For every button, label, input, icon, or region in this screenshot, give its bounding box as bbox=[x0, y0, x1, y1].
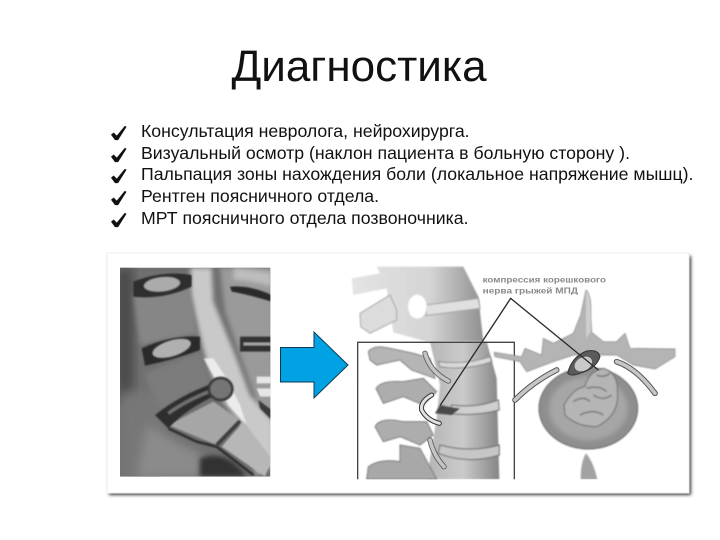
cross-section vertebra bbox=[494, 290, 675, 479]
item: consultation: Консультация невролога, нейрохирурга. bbox=[141, 121, 470, 141]
callout text: компрессия корешкового bbox=[483, 275, 606, 284]
upper vertebra bbox=[352, 267, 483, 342]
checklist bbox=[111, 121, 693, 228]
title: Диагностика bbox=[231, 42, 487, 91]
crop frame bbox=[358, 342, 514, 479]
callout lines bbox=[440, 298, 598, 406]
panel shadow and background bbox=[107, 253, 691, 495]
item: visual examination: Визуальный осмотр (наклон пациента в больную сторону ). bbox=[141, 143, 630, 163]
item: palpation: Пальпация зоны нахождения боли (локальное напряжение мышц). bbox=[141, 164, 693, 184]
item: MRI: МРТ поясничного отдела позвоночника. bbox=[141, 208, 468, 228]
callout text: нерва грыжей МПД bbox=[483, 287, 578, 296]
callout text bbox=[483, 278, 606, 295]
arrow bbox=[280, 332, 348, 398]
image panel bbox=[106, 252, 694, 498]
item: x-ray: Рентген поясничного отдела. bbox=[141, 186, 379, 206]
spine and vertebra illustration bbox=[352, 267, 675, 479]
MRI scan bbox=[117, 268, 273, 478]
lumbar column bbox=[367, 342, 499, 479]
